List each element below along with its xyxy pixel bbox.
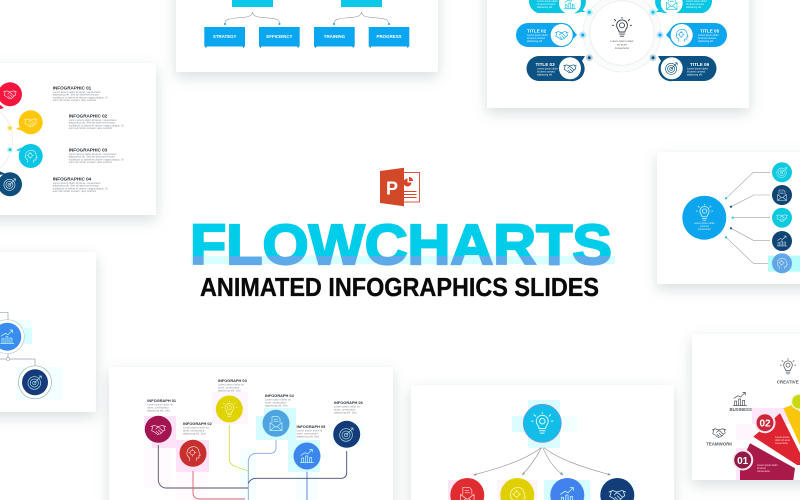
box: strategy xyxy=(204,27,245,48)
box: efficiency xyxy=(259,27,300,48)
pill: title 06 xyxy=(658,56,716,81)
panel: left infographic list xyxy=(0,63,156,215)
text: infographic 03: enim ad minim veniam, quis nostrud xyxy=(69,160,112,164)
panel: bottom right fan xyxy=(692,334,800,480)
segment 03 xyxy=(783,405,800,445)
pill: title 06: TITLE 06 xyxy=(690,62,710,67)
panel: right hub and spokes xyxy=(657,152,800,284)
text: infograph 03: amet, consectetur xyxy=(218,386,239,390)
node: chart xyxy=(550,478,584,500)
text: infograph 06: adipiscing elit. Sed xyxy=(334,410,357,414)
item: creative xyxy=(777,358,799,384)
pill: title 02: Lorem ipsum dolor xyxy=(527,34,548,37)
pill: title 02: TITLE 02 xyxy=(527,28,547,34)
pill: title 05 xyxy=(666,23,727,47)
connector: red xyxy=(193,471,245,499)
junction dot xyxy=(6,357,10,361)
title: FLOWCHARTS xyxy=(190,213,612,277)
node: bulb xyxy=(216,396,243,422)
text: infograph 06: Lorem ipsum dolor sit xyxy=(334,404,360,408)
hub circle: sit amet xyxy=(700,225,709,228)
bubble: yellow xyxy=(7,110,43,134)
text: infographic 04 xyxy=(53,176,108,193)
text: infograph 02: INFOGRAPH 02 xyxy=(183,421,213,426)
item: teamwork: TEAMWORK xyxy=(706,442,733,446)
node: title 05 xyxy=(656,32,664,38)
text: infographic 01: adipiscing elit. Sed do eiusmod tempor xyxy=(53,93,99,97)
hub circle xyxy=(682,196,726,240)
pill: title 06: Lorem ipsum dolor xyxy=(687,68,708,70)
text: infographic 01: enim ad minim veniam, quis nostrud xyxy=(53,98,96,102)
text: infograph 06 xyxy=(334,400,364,414)
segment 01: 01 xyxy=(737,456,749,467)
pill: title 04 xyxy=(655,0,712,14)
box: training xyxy=(314,27,355,48)
pill: title 03: adipiscing elit xyxy=(537,74,552,76)
bubble: cyan xyxy=(7,144,43,168)
text: infograph 02: amet, consectetur xyxy=(183,428,204,432)
node: mail xyxy=(262,410,290,437)
pill: title 01 xyxy=(529,0,586,14)
text: infograph 04: INFOGRAPH 04 xyxy=(265,393,295,398)
text: infographic 02: INFOGRAPHIC 02 xyxy=(69,114,108,118)
text: infographic 02: Lorem ipsum dolor sit amet, consectetur xyxy=(69,118,117,122)
item: creative: CREATIVE xyxy=(777,380,799,384)
node: head xyxy=(768,253,800,273)
pill: title 04: Lorem ipsum dolor xyxy=(686,0,707,3)
text: infograph 05: INFOGRAPH 05 xyxy=(296,424,326,429)
pill: title 03: Lorem ipsum dolor xyxy=(537,68,558,70)
central hub: consectetur xyxy=(615,46,629,50)
text: infographic 04: Lorem ipsum dolor sit amet, consectetur xyxy=(53,181,101,185)
text: infograph 01: amet, consectetur xyxy=(147,406,169,410)
top boxes xyxy=(232,0,382,7)
text: infographic 03: adipiscing elit. Sed do eiusmod tempor xyxy=(69,155,115,159)
hub circle: Lorem ipsum dolor xyxy=(694,222,715,225)
node: handshake xyxy=(600,478,634,500)
pill: title 03: sit amet consect xyxy=(537,70,555,74)
connector: maroon xyxy=(158,445,248,488)
text: infograph 01: Lorem ipsum dolor sit xyxy=(147,402,173,406)
pill: title 05: Lorem ipsum dolor xyxy=(698,34,719,37)
tinted blocks xyxy=(144,392,364,500)
segment 01: sit amet xyxy=(757,467,766,470)
spoke lines xyxy=(726,172,770,263)
text: infograph 05: Lorem ipsum dolor sit xyxy=(296,428,322,432)
tinted blocks xyxy=(448,400,636,500)
node: title 02 xyxy=(579,32,586,38)
pill: title 04: adipiscing elit xyxy=(686,6,701,9)
text: infograph 06: INFOGRAPH 06 xyxy=(334,400,364,405)
box: progress xyxy=(369,27,409,48)
hub circle: consectetur xyxy=(698,228,711,231)
node: head xyxy=(500,478,534,500)
bubble: dark blue xyxy=(0,171,22,196)
connector dots xyxy=(224,23,390,25)
central hub: sit amet xyxy=(617,42,627,46)
panel: top right radial titles xyxy=(487,0,749,108)
text: infograph 03: Lorem ipsum dolor sit xyxy=(218,382,244,386)
segment 02: consectetur xyxy=(775,442,788,445)
node: target xyxy=(772,162,792,182)
pill: title 05: sit amet consect xyxy=(698,37,716,40)
bubble: red xyxy=(0,82,22,110)
text: infographic 03: INFOGRAPHIC 03 xyxy=(69,148,108,152)
pill: title 01: Lorem ipsum dolor xyxy=(537,0,558,3)
panel: top centre org chart xyxy=(176,0,438,72)
pill: title 02: adipiscing elit xyxy=(527,40,542,43)
node: mail xyxy=(450,478,484,500)
text: infograph 05: adipiscing elit. Sed xyxy=(296,434,319,438)
connector: light blue xyxy=(248,440,276,500)
text: infographic 04: adipiscing elit. Sed do eiusmod tempor xyxy=(53,184,99,188)
pill: title 06: adipiscing elit xyxy=(687,74,702,76)
highlight blocks xyxy=(0,320,63,400)
central hub xyxy=(583,0,661,72)
node: title 04 xyxy=(650,9,656,16)
panel: bottom middle tree xyxy=(411,385,674,500)
text: infographic 04: INFOGRAPHIC 04 xyxy=(53,176,92,182)
text: infograph 04: Lorem ipsum dolor sit xyxy=(265,398,291,402)
text: infograph 05: amet, consectetur xyxy=(296,432,318,436)
text: infographic 04: enim ad minim veniam, quis nostrud xyxy=(53,189,96,193)
text: infographic 02: incididunt ut labore et dolore magna aliqua. Ut xyxy=(69,123,124,127)
node: mail xyxy=(772,185,792,205)
panel: left lower flow xyxy=(0,252,96,412)
pill: title 04: sit amet consect xyxy=(686,3,704,6)
item: business: BUSINESS xyxy=(729,407,752,412)
text: infograph 02 xyxy=(183,421,213,436)
text: infograph 01 xyxy=(147,398,177,412)
segment 01: consectetur xyxy=(757,470,770,473)
text: infograph 02: Lorem ipsum dolor sit xyxy=(183,426,209,430)
item: business xyxy=(729,392,752,412)
text: infographic 03: Lorem ipsum dolor sit amet, consectetur xyxy=(69,152,117,156)
tinted blocks xyxy=(736,408,800,480)
subtitle: ANIMATED INFOGRAPHICS SLIDES xyxy=(200,272,599,302)
box: training: TRAINING xyxy=(324,34,346,39)
text: infographic 01 xyxy=(53,86,108,102)
item: teamwork xyxy=(706,429,733,446)
node: head xyxy=(180,440,206,467)
text: infograph 01: adipiscing elit. Sed xyxy=(147,408,170,412)
node: handshake xyxy=(145,416,172,443)
pill: title 01: sit amet consect xyxy=(537,3,555,6)
pill: title 02: sit amet consect xyxy=(527,37,545,40)
node: title 01 xyxy=(586,9,593,16)
pill: title 01: adipiscing elit xyxy=(537,6,552,9)
node: handshake xyxy=(772,208,792,228)
icon: PowerPoint logo: P xyxy=(386,178,398,198)
segment 02: 02 xyxy=(759,418,771,430)
node: title 03 xyxy=(586,54,593,61)
text: infograph 02: adipiscing elit. Sed xyxy=(183,432,206,436)
connector: navy xyxy=(248,451,347,483)
segment 02 xyxy=(753,413,800,465)
text: infograph 04: adipiscing elit. Sed xyxy=(265,404,288,408)
text: infographic 02: adipiscing elit. Sed do eiusmod tempor xyxy=(69,121,115,125)
pill: title 02 xyxy=(516,23,577,47)
box: efficiency: EFFICIENCY xyxy=(266,34,293,39)
panel: bottom flow tree xyxy=(109,367,393,500)
pill: title 05: TITLE 05 xyxy=(700,28,720,34)
text: infograph 01: INFOGRAPH 01 xyxy=(147,398,177,403)
hub arc xyxy=(0,108,13,172)
node: chart xyxy=(772,231,792,251)
text: infograph 03 xyxy=(218,378,248,392)
node: title 06 xyxy=(650,54,656,61)
segment 02: dolor sit amet xyxy=(775,439,790,442)
text: infographic 01: incididunt ut labore et dolore magna aliqua. Ut xyxy=(53,95,108,99)
node: chart xyxy=(294,442,320,470)
text: infograph 04: amet, consectetur xyxy=(265,400,286,404)
central hub: Lorem ipsum dolor xyxy=(610,39,634,43)
connector: blue xyxy=(306,472,308,500)
box: strategy: STRATEGY xyxy=(213,34,237,39)
node: target xyxy=(333,421,360,448)
text: infographic 03 xyxy=(69,148,124,164)
pill: title 06: sit amet consect xyxy=(687,70,705,74)
text: infographic 02 xyxy=(69,114,124,130)
text: infograph 04 xyxy=(265,393,295,408)
pill: title 03 xyxy=(526,56,585,81)
top bulb circle xyxy=(523,404,561,442)
node: chart xyxy=(0,320,24,354)
node: target xyxy=(18,366,52,399)
arrow heads xyxy=(473,472,611,476)
segment 01: Lorem ipsum dolor xyxy=(757,464,778,467)
pill: title 05: adipiscing elit xyxy=(698,40,713,43)
segment 02: Lorem ipsum xyxy=(775,436,789,439)
text: infographic 04: incididunt ut labore et dolore magna aliqua. Ut xyxy=(53,186,108,190)
badge 03 xyxy=(792,394,800,409)
pill: title 03: TITLE 03 xyxy=(536,62,555,67)
text: infograph 06: amet, consectetur xyxy=(334,408,355,412)
segment 01 xyxy=(733,443,795,480)
text: infograph 03: INFOGRAPH 03 xyxy=(218,378,248,383)
text: infographic 01: INFOGRAPHIC 01 xyxy=(53,86,92,90)
text: infographic 01: Lorem ipsum dolor sit amet, consectetur xyxy=(53,90,101,94)
text: infographic 02: enim ad minim veniam, quis nostrud xyxy=(69,126,112,130)
text: infograph 03: adipiscing elit. Sed xyxy=(218,388,241,392)
connector: yellow xyxy=(229,425,248,471)
connector lines xyxy=(225,12,388,23)
box: progress: PROGRESS xyxy=(377,34,402,39)
text: infographic 03: incididunt ut labore et dolore magna aliqua. Ut xyxy=(69,157,124,161)
text: infograph 05 xyxy=(296,424,326,438)
arrows xyxy=(474,448,610,475)
spoke dots xyxy=(725,197,734,238)
connector lines xyxy=(0,312,35,366)
icon: PowerPoint logo xyxy=(380,168,420,206)
